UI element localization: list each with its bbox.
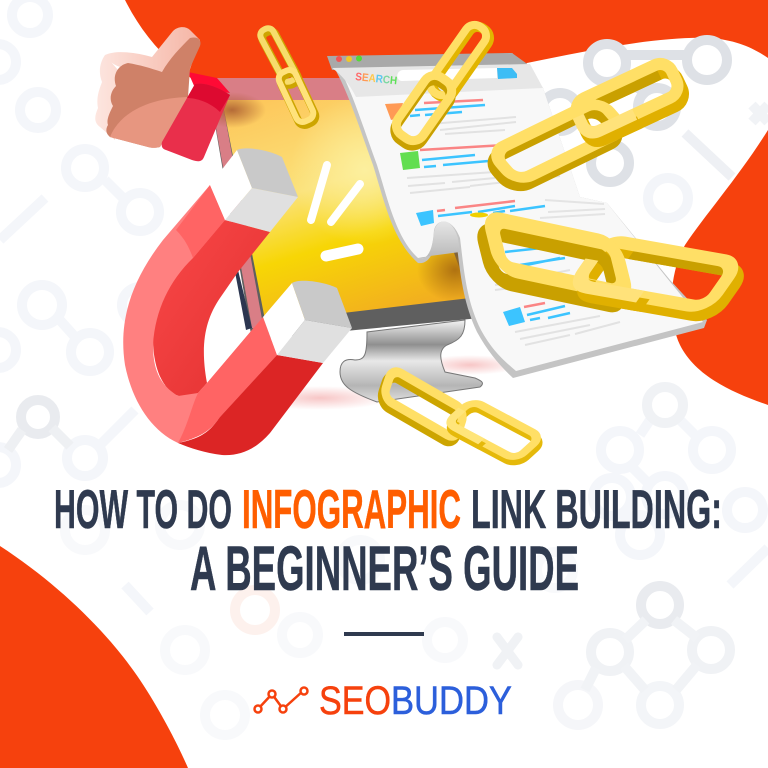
monitor bezel left <box>207 78 264 330</box>
search box <box>397 68 497 81</box>
magnet dark underside <box>178 355 323 455</box>
orange blob: bottom left <box>0 546 188 768</box>
chain: top left <box>258 26 318 127</box>
result row 3 <box>416 200 605 226</box>
monitor <box>198 78 520 410</box>
paper search results <box>327 53 707 378</box>
logo icon <box>254 688 308 712</box>
cuff <box>162 84 230 161</box>
browser bar <box>327 53 530 70</box>
logo <box>254 679 512 723</box>
thumb shadow <box>198 92 266 128</box>
logo text: BUDDY <box>391 679 512 723</box>
paper curl <box>418 221 460 258</box>
thumbs up hand <box>95 27 230 161</box>
search button <box>497 68 517 79</box>
hand extrusion <box>95 27 200 140</box>
screen highlight lines <box>311 165 360 222</box>
result row 2 <box>400 145 560 193</box>
magnet <box>123 148 352 455</box>
title: HOW TO DO <box>54 478 232 540</box>
title: INFOGRAPHIC <box>242 478 461 540</box>
result row 4 <box>495 246 570 290</box>
result row 1 <box>385 100 516 134</box>
magnet top tip <box>210 148 298 232</box>
orange blob: top <box>125 0 768 130</box>
magnet upper arm highlight <box>176 185 225 258</box>
title <box>54 478 722 604</box>
chain: upper right <box>488 60 687 190</box>
magnet bottom tip <box>263 281 352 363</box>
paper sheet <box>337 53 703 371</box>
magnet inner face <box>153 220 270 397</box>
logo text: SEO <box>319 679 391 723</box>
hand highlight <box>110 97 188 148</box>
chain: lower right <box>482 218 743 317</box>
result row 5 <box>503 303 620 345</box>
monitor dark edge <box>228 230 252 330</box>
monitor screen <box>222 100 470 325</box>
divider <box>344 632 424 636</box>
cuff top band <box>187 84 230 112</box>
monitor shadow <box>250 386 390 410</box>
chain: bottom <box>380 368 542 465</box>
monitor bezel top <box>207 78 375 100</box>
monitor frame <box>207 78 480 340</box>
hand face <box>106 37 201 148</box>
search label: SEARCH <box>355 71 398 87</box>
monitor stand <box>340 320 482 402</box>
paper shadow on floor <box>420 355 520 375</box>
window dots <box>336 56 362 62</box>
chain: top middle <box>391 21 493 150</box>
magnet outer face upper <box>123 185 277 443</box>
orange blob: right <box>672 130 768 405</box>
cuff back <box>188 72 230 93</box>
screen highlight dash <box>326 249 358 256</box>
screen glow <box>290 95 440 245</box>
paper shadow edge <box>332 53 707 378</box>
browser header <box>332 64 543 97</box>
logo text <box>319 679 512 723</box>
white-blob network rings <box>541 40 768 218</box>
screen dark corner <box>417 238 493 302</box>
magnet lower arm <box>178 317 277 443</box>
faint grey rings <box>8 387 730 725</box>
